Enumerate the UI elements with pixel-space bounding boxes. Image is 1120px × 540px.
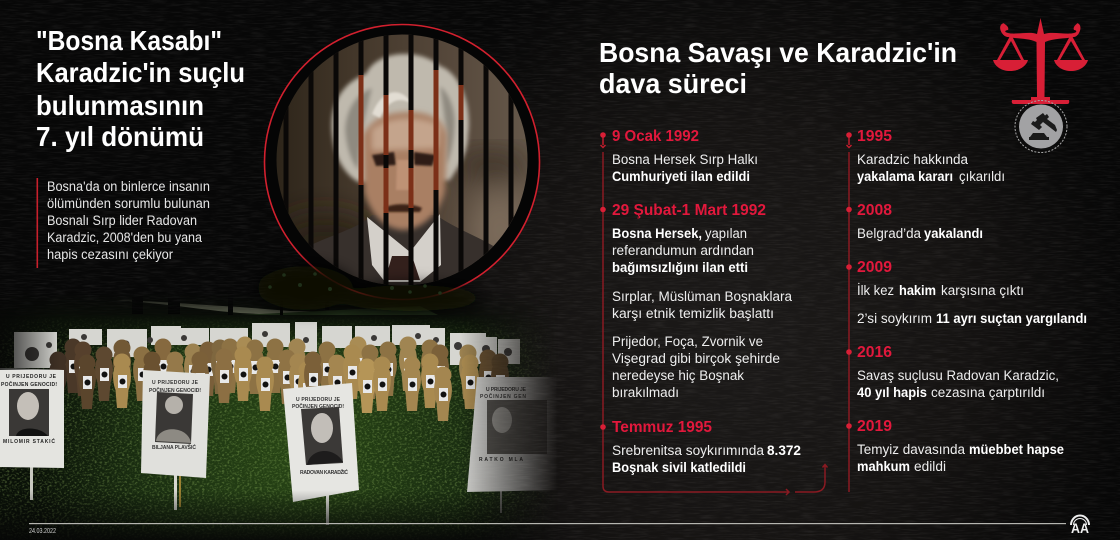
entry: Temmuz 1995: Temmuz 1995	[612, 419, 712, 436]
entry: 2019: 2019	[857, 418, 892, 435]
poster 2	[141, 370, 210, 510]
entry: 2019: mahkum	[857, 459, 910, 474]
entry: 2008: 2008	[857, 202, 892, 219]
intro text: hapis cezasını çekiyor	[47, 247, 173, 262]
poster 4	[467, 377, 560, 513]
entry: 29 Şubat-1 Mart 1992: Bosna Hersek,	[612, 226, 702, 241]
back row poster portraits	[25, 331, 512, 361]
shirt	[367, 214, 441, 282]
cutout figures front	[49, 344, 479, 421]
facial features	[372, 152, 436, 212]
entry: 2016	[857, 344, 1059, 400]
title right: Bosna Savaşı ve Karadzic'in	[599, 37, 957, 68]
entry: 2009: karşısına çıktı	[941, 283, 1024, 298]
poster 3: POČINJEN GENOCID!	[292, 403, 344, 410]
entry: 9 Ocak 1992: Cumhuriyeti ilan edildi	[612, 169, 750, 184]
timeline right	[846, 128, 1087, 492]
intro text: Bosnalı Sırp lider Radovan	[47, 213, 197, 228]
entry: 29 Şubat-1 Mart 1992: yapılan	[705, 226, 747, 241]
entry: 2009: 11 ayrı suçtan yargılandı	[936, 311, 1087, 326]
entry: 2016: cezasına çarptırıldı	[931, 385, 1045, 400]
line and arrows	[600, 136, 828, 495]
title right	[599, 37, 957, 99]
poster 1: MILOMIR STAKIĆ	[3, 437, 55, 445]
face	[363, 112, 447, 230]
poster 2: BILJANA PLAVŠIĆ	[152, 443, 196, 451]
poster 1	[0, 368, 64, 500]
icon: gavel	[1015, 100, 1067, 152]
entry: 1995: çıkarıldı	[959, 169, 1005, 184]
photo: field of posters and cutout figures	[0, 285, 560, 540]
poster 4: POČINJEN GEN	[480, 393, 526, 400]
poster 2: POČINJEN GENOCID!	[149, 387, 201, 394]
footer line	[29, 523, 1066, 524]
intro text: Bosna'da on binlerce insanın	[47, 179, 210, 194]
intro text	[36, 178, 210, 268]
entry: 2009: 2’si soykırım	[857, 311, 932, 326]
entry: 2009	[857, 259, 1087, 326]
entry: 2009: 2009	[857, 259, 892, 276]
foliage over portrait base	[257, 266, 482, 311]
entry: 29 Şubat-1 Mart 1992: Sırplar, Müslüman Boşnaklara	[612, 289, 792, 304]
timeline left	[600, 128, 828, 495]
entry: 1995: yakalama kararı	[857, 169, 953, 184]
entry: 29 Şubat-1 Mart 1992: 29 Şubat-1 Mart 1992	[612, 202, 766, 219]
entry: 9 Ocak 1992: 9 Ocak 1992	[612, 128, 699, 145]
dots	[600, 132, 606, 430]
entry: Temmuz 1995	[612, 419, 801, 475]
portrait behind bars	[257, 24, 540, 311]
photo fades	[0, 317, 544, 540]
entry: 1995: 1995	[857, 128, 892, 145]
title left	[36, 25, 245, 152]
cutout figures back	[64, 336, 509, 399]
poster 1: POČINJEN GENOCID!	[1, 381, 57, 388]
line and arrow	[846, 136, 852, 492]
entry: Temmuz 1995: Boşnak sivil katledildi	[612, 460, 746, 475]
entry: 29 Şubat-1 Mart 1992: bırakılmadı	[612, 385, 679, 400]
title left: 7. yıl dönümü	[36, 121, 204, 152]
entry: 29 Şubat-1 Mart 1992: neredeyse hiç Boşnak	[612, 368, 744, 383]
suit	[314, 215, 493, 286]
date: 24.03.2022	[29, 526, 56, 535]
poster 3: U PRIJEDORU JE	[296, 397, 341, 403]
prison bars	[284, 30, 514, 295]
entry: 9 Ocak 1992	[612, 128, 758, 184]
poster 4: U PRIJEDORU JE	[486, 387, 527, 393]
entry: 2016: Savaş suçlusu Radovan Karadzic,	[857, 368, 1059, 383]
entry: 2016: 40 yıl hapis	[857, 385, 927, 400]
entry: 2016: 2016	[857, 344, 892, 361]
entry: 29 Şubat-1 Mart 1992: Vişegrad gibi birçok şehirde	[612, 351, 780, 366]
grass	[0, 315, 560, 540]
entry: 29 Şubat-1 Mart 1992	[612, 202, 792, 400]
intro text: ölümünden sorumlu bulunan	[47, 196, 210, 211]
poster 2: U PRIJEDORU JE	[152, 380, 199, 386]
poster 3: RADOVAN KARADŽIĆ	[300, 468, 348, 476]
entry: 2019: Temyiz davasında	[857, 442, 965, 457]
icon: scales of justice	[993, 18, 1088, 104]
background smudges	[297, 141, 528, 258]
entry: Temmuz 1995: 8.372	[767, 443, 801, 458]
entry: 29 Şubat-1 Mart 1992: karşı etnik temizlik başlattı	[612, 306, 774, 321]
title left: "Bosna Kasabı"	[36, 25, 222, 56]
hair curl	[372, 92, 412, 118]
entry: 2009: hakim	[899, 283, 936, 298]
entry: 1995	[857, 128, 1005, 184]
entry: 2019	[857, 418, 1064, 474]
poster 3	[283, 383, 359, 525]
poster 1: U PRIJEDORU JE	[6, 374, 57, 380]
entry: 9 Ocak 1992: Bosna Hersek Sırp Halkı	[612, 152, 758, 167]
title right: dava süreci	[599, 68, 747, 99]
entry: 1995: Karadzic hakkında	[857, 152, 968, 167]
title left: bulunmasının	[36, 90, 204, 121]
tie	[385, 256, 420, 280]
poster 4: RATKO MLA	[479, 457, 523, 463]
intro text: Karadzic, 2008'den bu yana	[47, 230, 202, 245]
title left: Karadzic'in suçlu	[36, 57, 245, 88]
entry: 2008	[857, 202, 983, 241]
back row posters	[14, 322, 520, 368]
entry: 29 Şubat-1 Mart 1992: bağımsızlığını ilan etti	[612, 260, 748, 275]
entry: 2019: edildi	[914, 459, 946, 474]
entry: 2008: yakalandı	[924, 226, 983, 241]
trees and path	[62, 300, 503, 315]
entry: 29 Şubat-1 Mart 1992: Prijedor, Foça, Zvornik ve	[612, 334, 763, 349]
entry: 29 Şubat-1 Mart 1992: referandumun ardından	[612, 243, 754, 258]
entry: 2009: İlk kez	[857, 283, 894, 298]
entry: Temmuz 1995: Srebrenitsa soykırımında	[612, 443, 764, 458]
entry: 2019: müebbet hapse	[969, 442, 1064, 457]
dots	[846, 132, 852, 429]
entry: 2008: Belgrad’da	[857, 226, 921, 241]
hair	[332, 54, 469, 182]
logo: AA: AA	[1071, 520, 1089, 536]
